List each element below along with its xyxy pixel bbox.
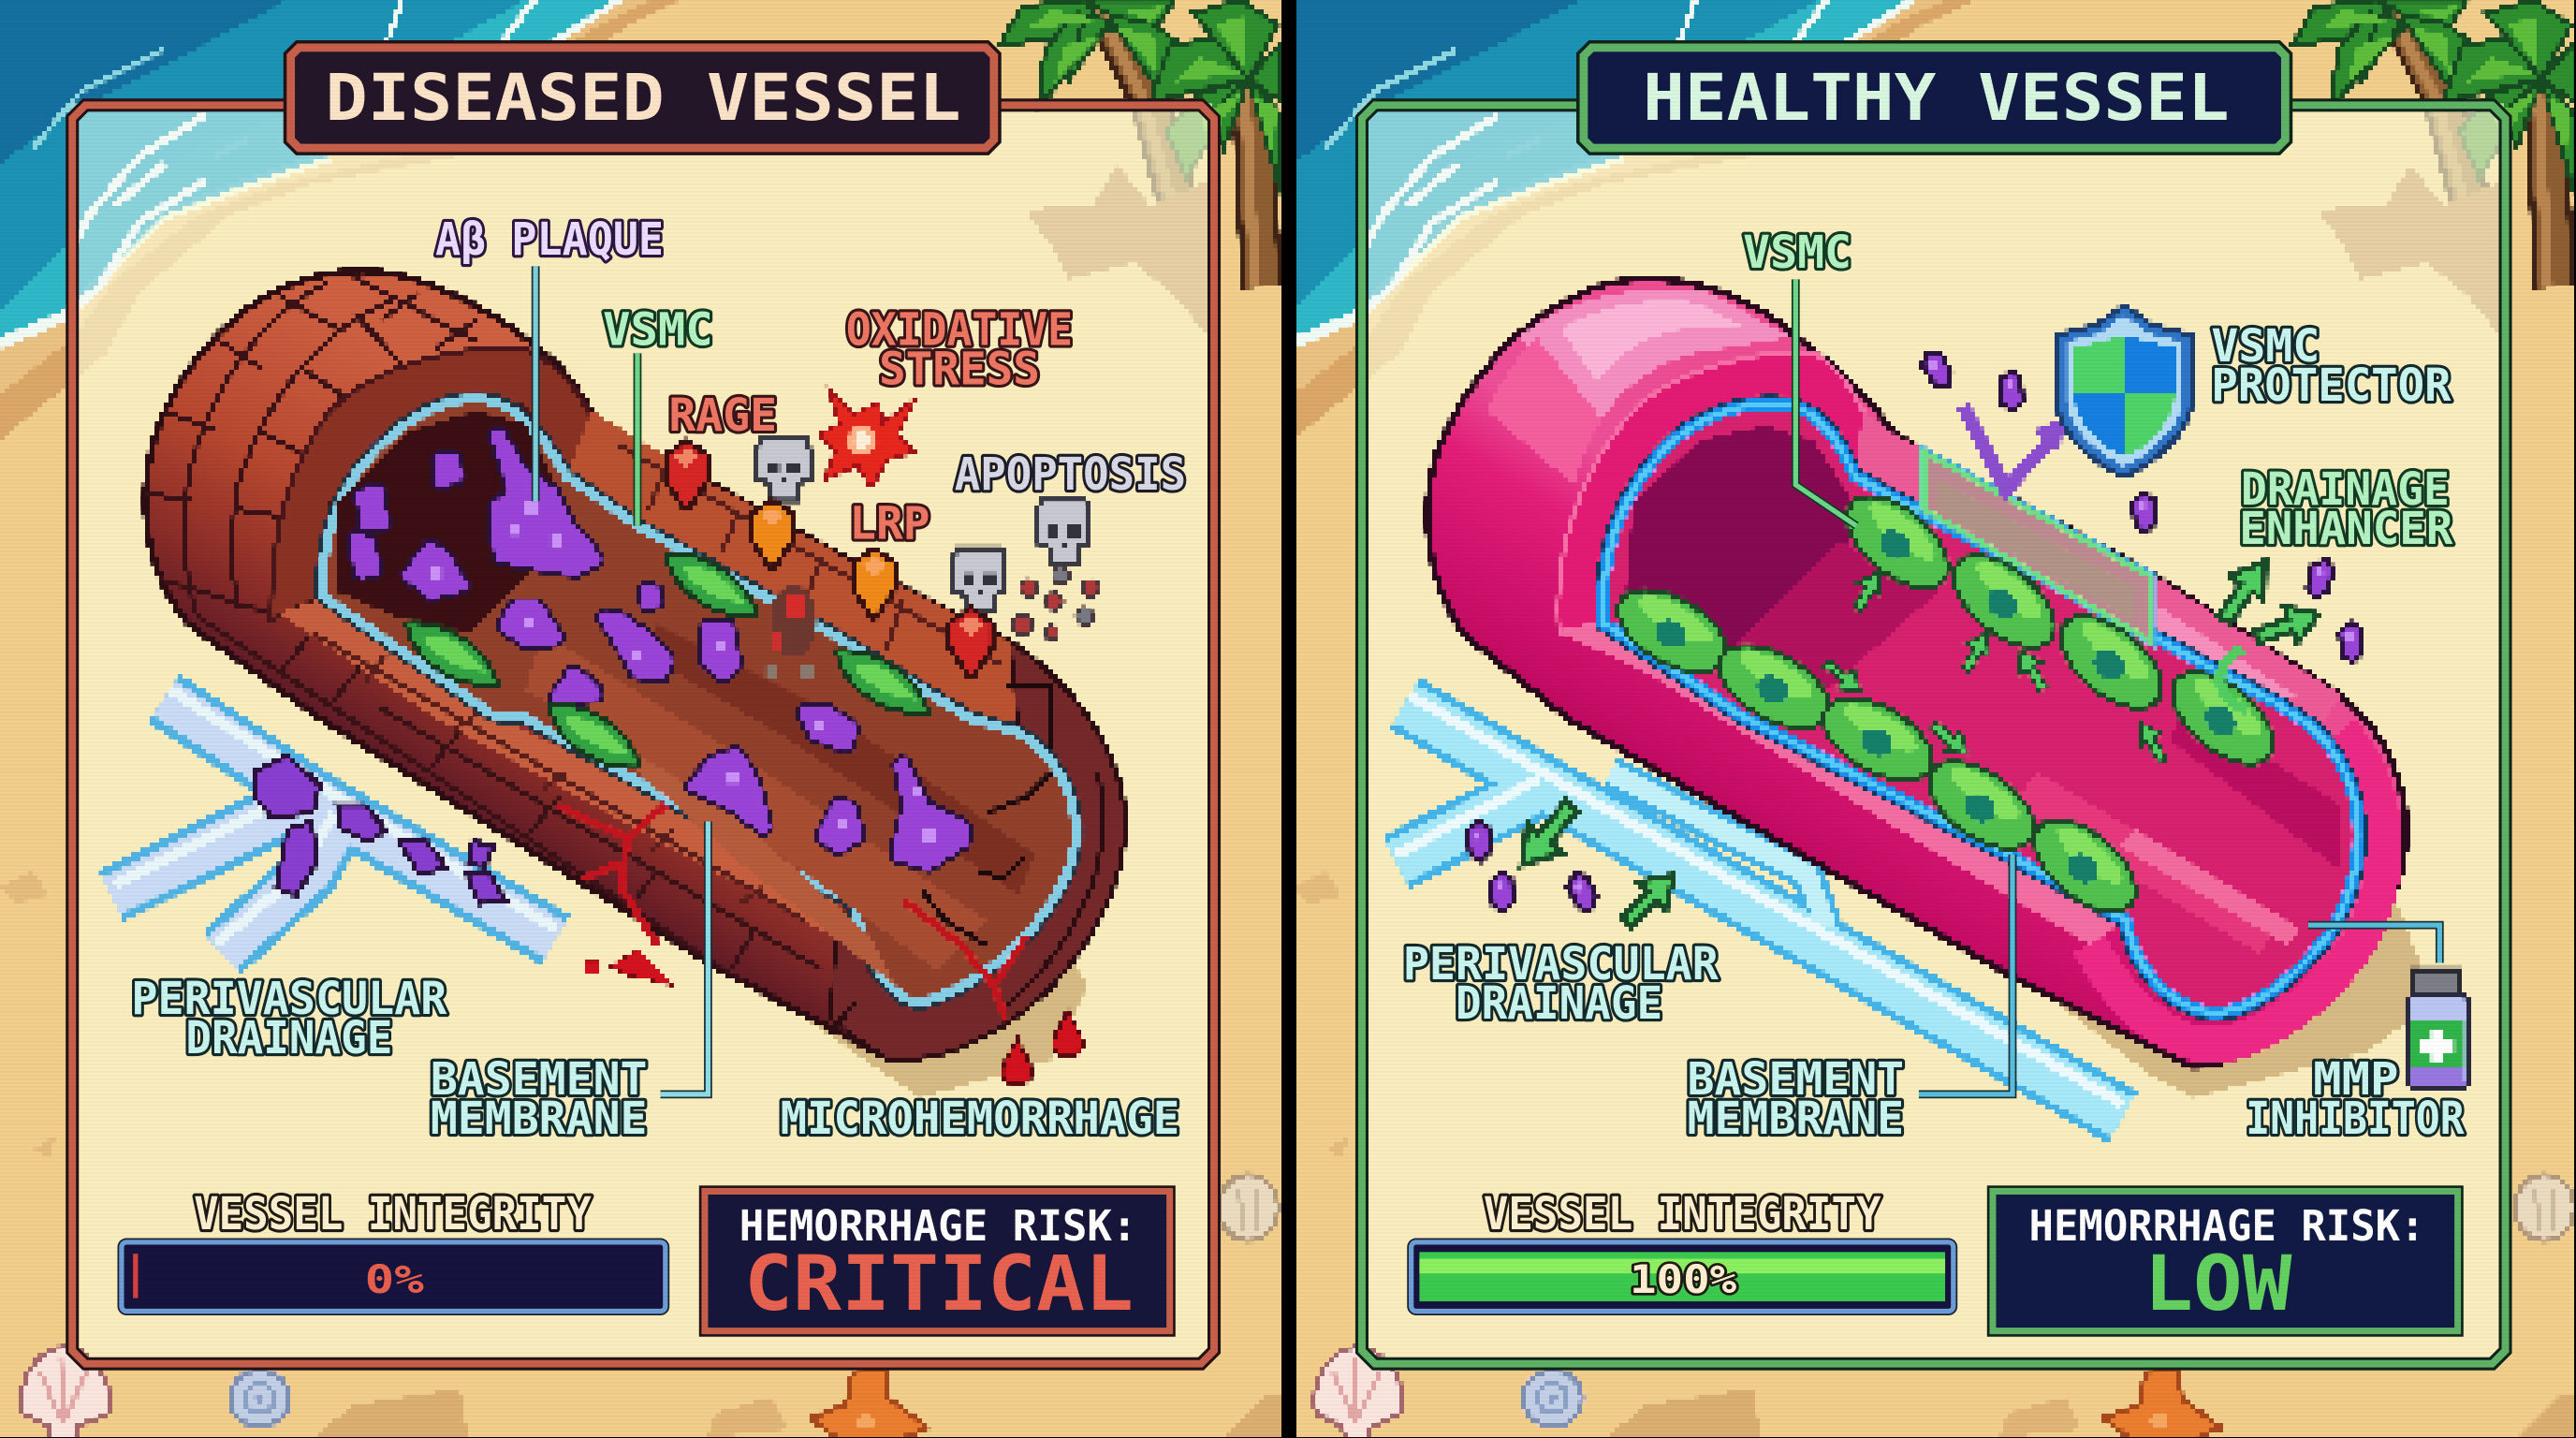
icon: shield bbox=[2056, 305, 2191, 477]
perivascular drainage channels bbox=[111, 690, 555, 953]
title plate: diseased vessel: DISEASED VESSEL bbox=[326, 61, 961, 136]
lumen with membrane bbox=[1603, 404, 2359, 1012]
labels: healthy bbox=[1403, 227, 2465, 1145]
black cracks bbox=[920, 772, 1051, 945]
icon: drainage enhancer arrows bbox=[2207, 550, 2325, 710]
VSMC cells bbox=[1602, 476, 2292, 932]
ground shadow bbox=[353, 707, 1088, 1097]
labels: healthy: VSMC bbox=[2211, 320, 2320, 373]
labels: diseased: VSMC bbox=[603, 304, 713, 357]
icon: purple deflect arrow bbox=[1963, 406, 2054, 490]
icons: therapy effects bbox=[1467, 305, 2467, 1088]
labels: diseased: OXIDATIVE bbox=[846, 304, 1073, 357]
title plate: diseased vessel bbox=[291, 48, 994, 148]
hemorrhage risk box: healthy: LOW bbox=[2144, 1240, 2292, 1328]
vessel: diseased cross-section bbox=[144, 271, 1124, 1097]
degenerating VSMC leaves bbox=[406, 553, 929, 768]
bottom pink band bbox=[1559, 623, 2126, 945]
microhemorrhage cracks bbox=[559, 805, 1027, 1019]
hemorrhage risk box: diseased: CRITICAL bbox=[744, 1240, 1134, 1328]
labels: diseased: LRP bbox=[849, 498, 929, 550]
back lumen darkness bbox=[337, 411, 575, 633]
icon: skull bbox=[953, 549, 1005, 612]
panel frame: diseased bbox=[72, 105, 1214, 1364]
labels: diseased: PERIVASCULAR bbox=[131, 973, 447, 1025]
icon: RAGE receptor lower bbox=[949, 608, 992, 677]
vessel integrity meter: healthy bbox=[1412, 1188, 1954, 1312]
icon: skull upper bbox=[1036, 501, 1090, 565]
icon: oxidative stress burst bbox=[818, 391, 915, 488]
labels: diseased: MEMBRANE bbox=[431, 1093, 648, 1145]
labels: diseased: Aβ PLAQUE bbox=[435, 213, 664, 266]
labels: healthy: DRAINAGE bbox=[2241, 463, 2450, 516]
labels: healthy: PERIVASCULAR bbox=[1403, 938, 1720, 990]
icon: blood drop bbox=[1053, 1010, 1083, 1056]
icon: RAGE receptor bbox=[666, 440, 708, 509]
labels: diseased: DRAINAGE bbox=[185, 1012, 392, 1064]
labels: diseased: APOPTOSIS bbox=[955, 448, 1186, 501]
perivascular drainage channels: healthy bbox=[1397, 695, 2123, 1117]
hemorrhage risk box: healthy: HEMORRHAGE RISK: bbox=[2029, 1201, 2425, 1251]
floor stripes bbox=[2012, 772, 2284, 953]
leader lines: diseased bbox=[535, 266, 708, 1094]
icon: blood splatter bbox=[585, 949, 674, 986]
vessel integrity meter: diseased: VESSEL INTEGRITY bbox=[194, 1188, 592, 1240]
rim ring bbox=[271, 348, 600, 620]
hemorrhage risk box: diseased bbox=[705, 1191, 1170, 1331]
wall highlights bbox=[1519, 289, 1791, 419]
labels: healthy: MMP bbox=[2313, 1053, 2398, 1106]
glass repair patch bbox=[1924, 452, 2150, 640]
icon: skull bbox=[757, 436, 811, 501]
title plate: healthy vessel: HEALTHY VESSEL bbox=[1643, 61, 2230, 136]
icon: damaged cell bbox=[766, 585, 816, 679]
hemorrhage risk box: diseased: HEMORRHAGE RISK: bbox=[739, 1201, 1137, 1251]
labels: diseased bbox=[131, 213, 1186, 1145]
labels: healthy: DRAINAGE bbox=[1456, 977, 1662, 1030]
icons: receptors, stress, apoptosis and blood bbox=[585, 391, 1099, 1084]
far end cross-section bbox=[829, 642, 1124, 1059]
brick wall silhouette bbox=[146, 271, 1124, 1059]
icon: amyloid particles bbox=[1467, 347, 2363, 915]
brick courses bbox=[144, 276, 822, 1003]
panel: healthy vessel bbox=[1293, 0, 2574, 1438]
icon: apoptotic debris bbox=[1012, 567, 1099, 639]
beach background: healthy side bbox=[1293, 0, 2574, 1438]
vessel integrity meter: diseased: 0% bbox=[365, 1256, 425, 1302]
back lumen bbox=[1625, 426, 1855, 674]
outer wall bbox=[1427, 279, 2406, 1066]
icon: blood drop bbox=[1003, 1038, 1032, 1084]
panel frame: healthy bbox=[1362, 105, 2506, 1364]
labels: diseased: STRESS bbox=[879, 344, 1040, 396]
icon: orange LRP receptor bbox=[751, 500, 794, 568]
labels: healthy: PROTECTOR bbox=[2211, 360, 2452, 412]
icon: MMP inhibitor vial bbox=[2408, 970, 2467, 1088]
labels: diseased: RAGE bbox=[668, 389, 777, 442]
labels: healthy: MEMBRANE bbox=[1687, 1093, 1904, 1145]
labels: diseased: MICROHEMORRHAGE bbox=[781, 1093, 1179, 1145]
panel: diseased vessel bbox=[0, 0, 1281, 1438]
vessel integrity meter: healthy: VESSEL INTEGRITY bbox=[1484, 1188, 1881, 1240]
top brick band bbox=[567, 411, 1027, 731]
top wall strip bbox=[1855, 411, 2341, 731]
lumen floor with membrane bbox=[323, 399, 1076, 1003]
bottom light brick band bbox=[279, 596, 842, 930]
vessel: healthy cross-section bbox=[1427, 279, 2435, 1097]
ground shadow bbox=[1971, 822, 2435, 1097]
labels: healthy: INHIBITOR bbox=[2246, 1093, 2465, 1145]
beach background: diseased side bbox=[0, 0, 1281, 1438]
center divider bbox=[1281, 0, 1295, 1438]
leader lines: healthy bbox=[1795, 279, 2439, 1094]
title plate: healthy vessel bbox=[1584, 48, 2285, 148]
labels: healthy: BASEMENT bbox=[1687, 1053, 1904, 1106]
icon: drainage flow arrows bbox=[1505, 792, 1687, 935]
labels: healthy: ENHANCER bbox=[2239, 503, 2453, 555]
icon: LRP receptor bbox=[853, 549, 896, 618]
labels: diseased: BASEMENT bbox=[431, 1053, 648, 1106]
arrow head bbox=[2034, 418, 2063, 453]
plaque bbox=[357, 435, 961, 862]
floor stripes bbox=[526, 633, 986, 970]
inner arrows bbox=[1819, 565, 2174, 767]
far end ring bbox=[2089, 731, 2384, 1045]
vessel integrity meter: healthy: 100% bbox=[1630, 1256, 1737, 1302]
rim bbox=[1559, 352, 1873, 633]
vessel integrity meter: diseased bbox=[122, 1188, 666, 1312]
labels: healthy: VSMC bbox=[1743, 227, 1852, 279]
burst core bbox=[848, 426, 877, 455]
hemorrhage risk box: healthy bbox=[1993, 1191, 2458, 1331]
